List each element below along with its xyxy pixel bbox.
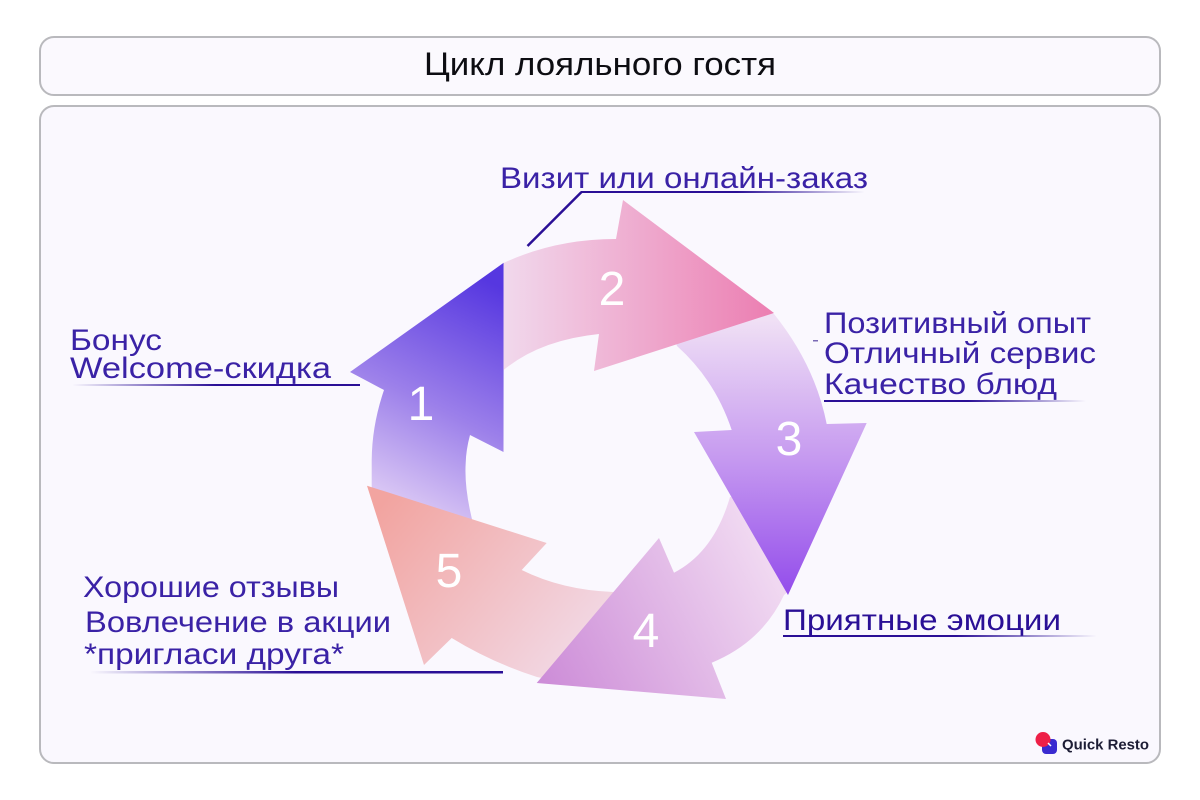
title: Цикл лояльного гостя xyxy=(424,46,776,82)
label: positive experience: Качество блюд xyxy=(824,368,1057,401)
title panel xyxy=(40,37,1160,95)
label: visit or online order xyxy=(500,162,868,246)
number 5: 5 xyxy=(436,545,462,598)
number 3: 3 xyxy=(776,413,802,466)
arrow 4 xyxy=(537,497,790,699)
label: bonus xyxy=(70,324,360,386)
number 2: 2 xyxy=(599,263,625,316)
logo: Quick Resto: Quick Resto xyxy=(1062,736,1149,754)
arrow 5 xyxy=(367,486,620,678)
label: pleasant emotions: Приятные эмоции xyxy=(783,604,1061,637)
label: visit or online order: Визит или онлайн-заказ xyxy=(500,162,868,195)
arrow 3 xyxy=(675,312,867,595)
arrow 1 xyxy=(350,263,504,527)
label: positive experience: Позитивный опыт xyxy=(824,307,1091,340)
label: good reviews: Хорошие отзывы xyxy=(83,571,339,604)
number 1: 1 xyxy=(408,378,434,431)
logo: Quick Resto xyxy=(1036,732,1149,754)
label: positive experience xyxy=(813,307,1096,402)
label: bonus: Бонус xyxy=(70,324,162,357)
number 4: 4 xyxy=(633,605,659,658)
label: good reviews: *пригласи друга* xyxy=(84,638,344,671)
label: good reviews xyxy=(83,571,503,674)
label: bonus: Welcome-скидка xyxy=(70,352,331,385)
cycle diagram xyxy=(350,200,867,699)
arrow 2 xyxy=(504,200,774,371)
main panel xyxy=(40,106,1160,763)
label: good reviews: Вовлечение в акции xyxy=(85,606,391,639)
label: positive experience: Отличный сервис xyxy=(824,337,1096,370)
